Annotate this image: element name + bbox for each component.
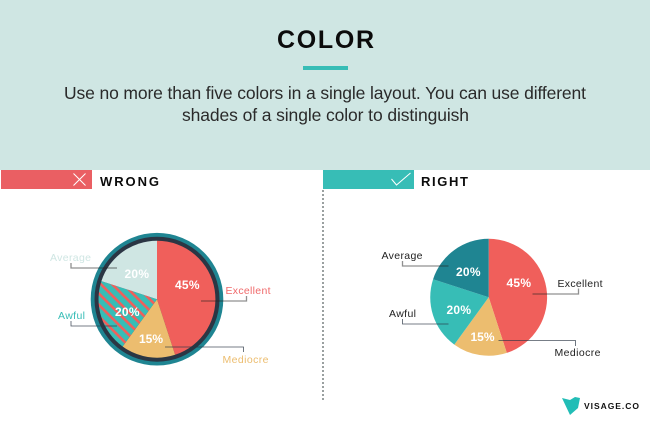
value labels: 20% xyxy=(446,303,471,317)
category labels: Average xyxy=(382,250,423,262)
leader lines xyxy=(71,263,246,352)
category labels xyxy=(382,250,603,359)
icon: logo mark xyxy=(562,397,580,415)
pie chart: right xyxy=(430,239,547,356)
dotted divider xyxy=(322,190,324,400)
category labels: Awful xyxy=(389,308,416,320)
pie chart: wrong xyxy=(91,233,223,366)
title: COLOR xyxy=(277,26,374,54)
value labels: 20% xyxy=(456,265,481,279)
description text: shades of a single color to distinguish xyxy=(182,105,469,125)
value labels: 45% xyxy=(506,276,531,290)
description text: Use no more than five colors in a single layout. You can use different xyxy=(64,83,586,103)
value labels: 15% xyxy=(470,330,495,344)
wrong heading: WRONG xyxy=(100,174,159,189)
icon: cross xyxy=(74,174,86,186)
category labels: Excellent xyxy=(226,285,271,297)
logo: visage.co xyxy=(562,397,639,415)
category labels: Awful xyxy=(58,310,85,322)
icon: check xyxy=(392,173,410,185)
category labels: Mediocre xyxy=(554,347,601,359)
value labels: 15% xyxy=(139,332,163,346)
value labels xyxy=(115,267,200,346)
category labels xyxy=(50,252,271,366)
category labels: Mediocre xyxy=(222,354,269,366)
leader lines xyxy=(402,261,578,346)
value labels: 20% xyxy=(124,267,149,281)
description text xyxy=(64,83,586,125)
value labels: 20% xyxy=(115,305,140,319)
category labels: Average xyxy=(50,252,91,264)
header panel xyxy=(0,0,650,170)
value labels: 45% xyxy=(175,278,200,292)
wrong banner xyxy=(1,170,92,189)
value labels xyxy=(446,265,531,344)
panel: right xyxy=(323,170,603,359)
right banner xyxy=(323,170,414,189)
logo text: VISAGE.CO xyxy=(584,401,639,411)
title underline xyxy=(303,66,348,70)
category labels: Excellent xyxy=(558,278,603,290)
right heading: RIGHT xyxy=(421,174,468,189)
panel: wrong xyxy=(1,170,271,366)
